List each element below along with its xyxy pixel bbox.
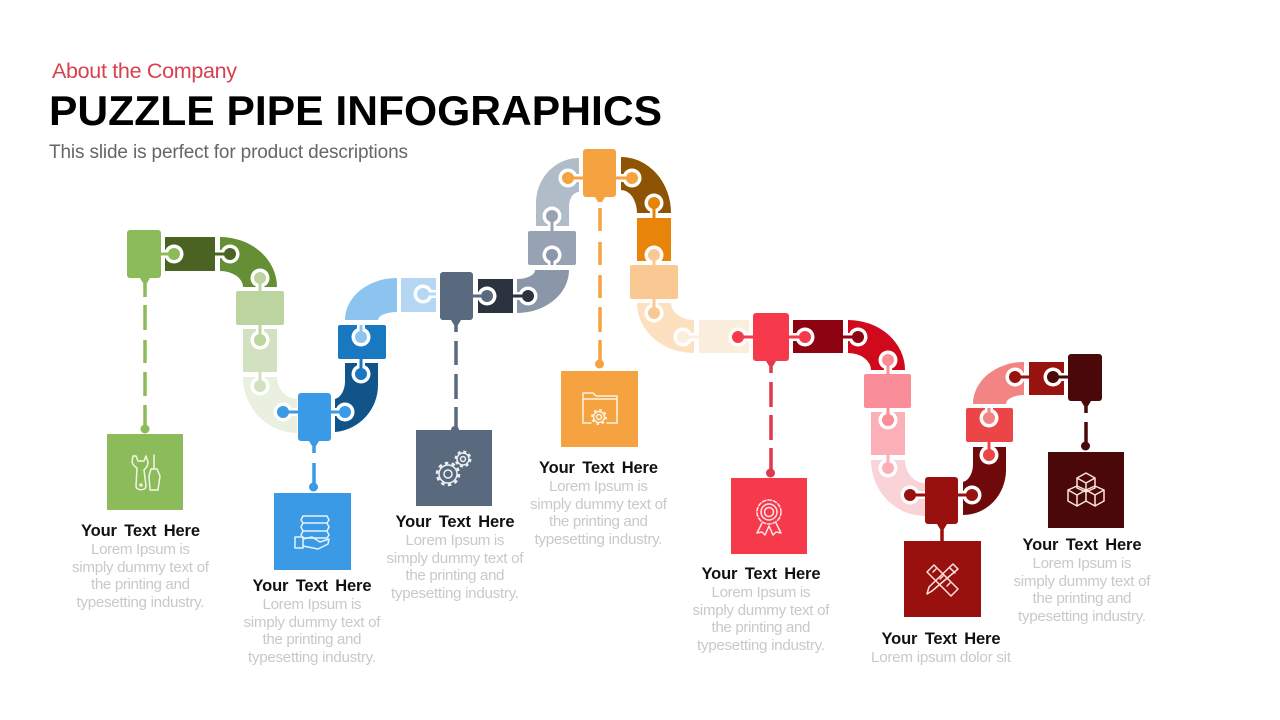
step text: the printing and xyxy=(712,619,810,636)
colour box xyxy=(274,493,351,570)
puzzle pipe xyxy=(127,149,1102,524)
step text: Your Text Here xyxy=(539,459,658,477)
step text: Your Text Here xyxy=(1022,536,1142,554)
step 1: green xyxy=(72,278,210,611)
step text: typesetting industry. xyxy=(248,649,376,666)
step text: Your Text Here xyxy=(702,565,820,583)
step text: typesetting industry. xyxy=(391,585,519,602)
pipe section: green xyxy=(127,230,297,433)
dashed connector xyxy=(140,278,150,434)
icon: stacked cubes xyxy=(1068,473,1104,506)
colour box xyxy=(904,541,981,617)
step text: Lorem ipsum dolor sit xyxy=(871,649,1012,666)
pipe section: red xyxy=(753,313,925,516)
step text: Lorem Ipsum is xyxy=(91,541,190,558)
step text: typesetting industry. xyxy=(1018,608,1146,625)
connector xyxy=(937,524,947,541)
step text: Lorem Ipsum is xyxy=(406,532,505,549)
icon: pencil and ruler xyxy=(927,564,958,596)
step text: the printing and xyxy=(406,567,504,584)
step text xyxy=(530,459,668,548)
step text xyxy=(1014,536,1151,625)
step text: the printing and xyxy=(91,576,190,593)
step text: simply dummy text of xyxy=(1014,573,1151,590)
colour box xyxy=(561,371,638,447)
dashed connector xyxy=(451,320,461,434)
step 2: blue xyxy=(244,441,381,666)
title: PUZZLE PIPE INFOGRAPHICS xyxy=(49,87,662,134)
eyebrow: about the company: About the Company xyxy=(52,59,237,83)
pipe section: slate xyxy=(440,158,579,320)
step 7: maroon xyxy=(1014,401,1151,625)
step text: Your Text Here xyxy=(882,630,1000,648)
step text: Your Text Here xyxy=(252,577,372,595)
step text: Lorem Ipsum is xyxy=(262,596,362,613)
pipe section: orange xyxy=(583,149,749,353)
step 3: slate xyxy=(386,320,524,602)
step text: simply dummy text of xyxy=(72,559,210,576)
step text: typesetting industry. xyxy=(76,594,204,611)
step text: typesetting industry. xyxy=(534,531,662,548)
colour box xyxy=(107,434,183,510)
step 6: dark red xyxy=(871,524,1012,666)
subtitle: This slide is perfect for product descriptions xyxy=(49,142,408,163)
step text: Lorem Ipsum is xyxy=(1032,555,1132,572)
step text xyxy=(871,630,1012,666)
step text: simply dummy text of xyxy=(692,602,830,619)
colour box xyxy=(416,430,492,506)
colour box xyxy=(1048,452,1124,528)
icon: gears xyxy=(437,452,470,485)
step text xyxy=(244,577,381,666)
step text: Lorem Ipsum is xyxy=(549,478,648,495)
step text: Your Text Here xyxy=(81,522,200,540)
dashed connector xyxy=(309,441,319,492)
step text: simply dummy text of xyxy=(530,496,668,513)
step 5: red xyxy=(692,361,830,654)
pipe section: blue xyxy=(298,278,436,441)
step text: simply dummy text of xyxy=(386,550,524,567)
puzzle tabs xyxy=(161,168,1068,504)
icon: wrench and screwdriver xyxy=(132,455,160,490)
dashed connector xyxy=(595,197,605,368)
icon: hand holding stack xyxy=(295,516,329,549)
dashed connector xyxy=(766,361,776,478)
step text xyxy=(72,522,210,611)
dashed connector xyxy=(1081,401,1091,450)
step text: the printing and xyxy=(262,631,362,648)
step text: Lorem Ipsum is xyxy=(712,584,811,601)
step text xyxy=(692,565,830,654)
pipe section: dark red xyxy=(925,354,1102,524)
step text: the printing and xyxy=(549,513,648,530)
icon: award rosette xyxy=(757,500,781,535)
step text: the printing and xyxy=(1032,590,1132,607)
step text: Your Text Here xyxy=(396,513,514,531)
icon: folder with gear xyxy=(583,393,617,424)
step text: simply dummy text of xyxy=(244,614,381,631)
step text: typesetting industry. xyxy=(697,637,825,654)
step 4: orange xyxy=(530,197,668,548)
step text xyxy=(386,513,524,602)
colour box xyxy=(731,478,807,554)
